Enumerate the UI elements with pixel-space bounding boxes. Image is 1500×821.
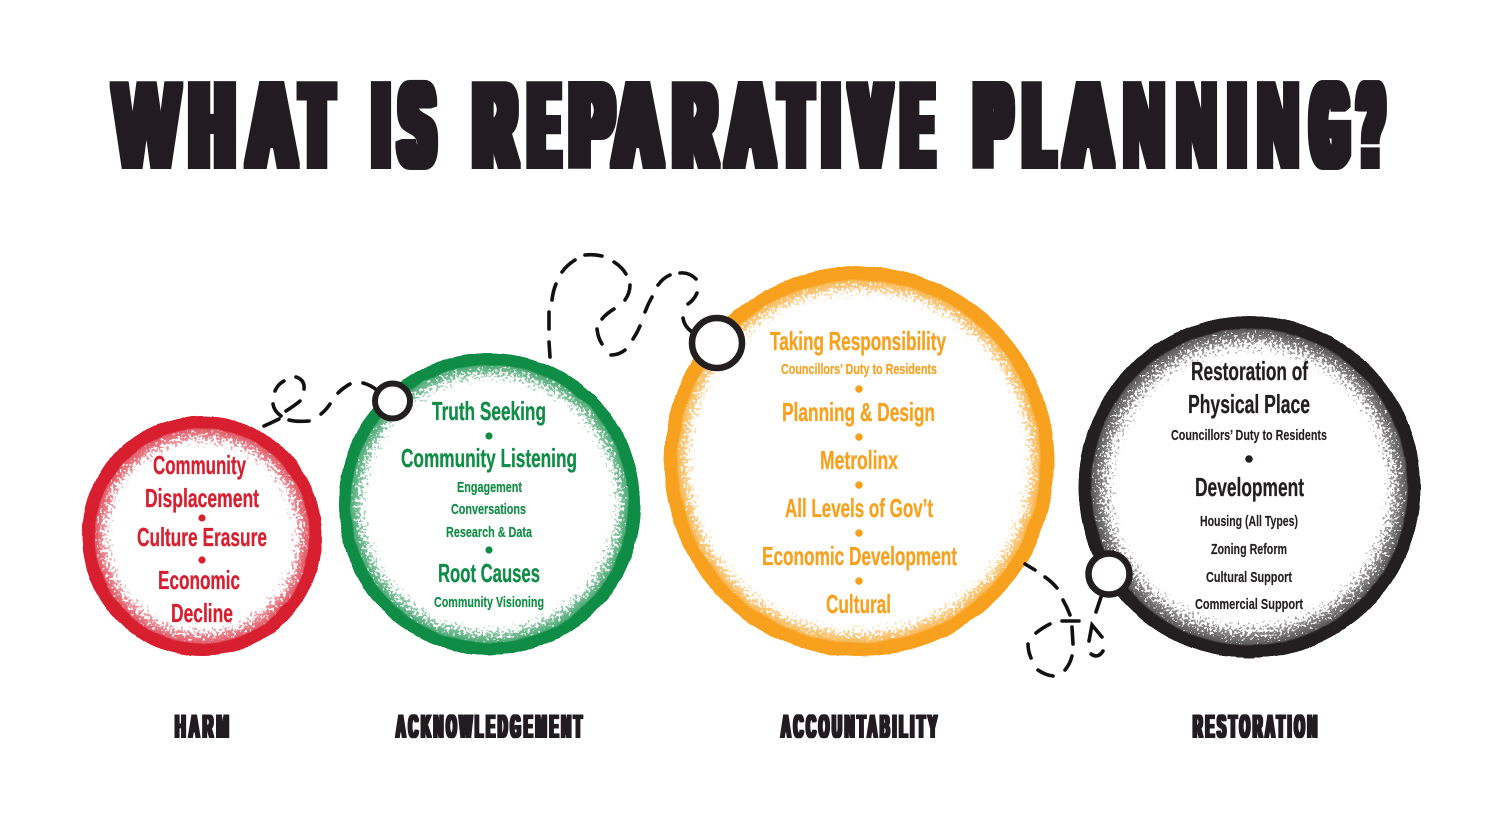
title [114,59,1382,192]
title: H [191,59,233,192]
title: P [976,59,1010,192]
title: N [1177,59,1216,192]
harm text: Community [153,450,246,480]
acknowledgement text: Conversations [451,501,526,518]
text: ? [1360,59,1382,192]
acknowledgement text: Root Causes [438,558,540,588]
panel: acknowledgement circle [338,353,640,655]
panel: restoration circle [1078,316,1420,658]
acknowledgement text: Research & Data [446,524,532,541]
node: restoration ring [1088,554,1130,594]
title: N [1258,59,1299,192]
title: A [615,59,660,192]
node: accountability ring [692,318,742,368]
title: V [852,59,888,192]
arrow: dashed path harm to acknowledgement [264,377,378,426]
harm text: Displacement [145,483,259,513]
stage labels: ACKNOWLEDGEMENT [396,708,585,744]
accountability text: Metrolinx [820,445,898,475]
accountability text: Planning & Design [782,397,935,427]
title: A [728,59,772,192]
accountability text: Taking Responsibility [770,326,946,356]
restoration text: Zoning Reform [1211,541,1287,558]
textured ring: restoration [1078,316,1420,658]
title: I [375,59,387,192]
accountability text: All Levels of Gov’t [785,493,933,523]
title: N [1124,59,1165,192]
acknowledgement text: Engagement [457,479,522,496]
acknowledgement text: Community Listening [401,443,577,473]
panel: harm circle [82,416,322,656]
acknowledgement text [401,396,577,611]
restoration text [1171,356,1327,613]
panel: accountability circle [664,266,1054,656]
restoration text: Restoration of [1191,356,1308,386]
title: R [675,59,715,192]
accountability text: Councillors’ Duty to Residents [781,361,937,378]
title: S [401,59,433,192]
title: I [825,59,837,192]
title: A [1066,59,1110,192]
restoration text: Development [1195,472,1304,502]
acknowledgement text: Community Visioning [434,594,544,611]
title: T [782,59,810,192]
harm text: Economic [158,565,240,595]
stage labels: HARM [175,708,232,744]
accountability text: Economic Development [762,541,957,571]
harm text: Decline [171,598,233,628]
restoration text: Physical Place [1188,389,1310,419]
title: P [571,59,612,192]
title: L [1026,59,1052,192]
arrow: dashed path acknowledgement to accountability [549,255,697,357]
title: T [303,59,331,192]
node: acknowledgement ring [375,384,410,418]
restoration text: Housing (All Types) [1200,513,1298,530]
title: E [904,59,932,192]
harm text: Culture Erasure [137,522,267,552]
title: A [249,59,294,192]
textured ring: acknowledgement [338,353,640,655]
title: G [1313,59,1347,192]
stage labels: ACCOUNTABILITY [781,708,940,744]
stage labels [175,708,1320,744]
textured ring: harm [82,416,322,656]
accountability text: Cultural [826,589,891,619]
harm text [137,450,267,628]
arrow: dashed path accountability to restoration [1025,564,1103,676]
text: RESTORATION [1193,708,1320,744]
title: E [531,59,558,192]
restoration text: Cultural Support [1206,569,1292,586]
accountability text [762,326,957,619]
title: R [475,59,515,192]
restoration text: Councillors’ Duty to Residents [1171,427,1327,444]
title: I [1231,59,1243,192]
acknowledgement text: Truth Seeking [432,396,546,426]
restoration text: Commercial Support [1195,596,1303,613]
textured ring: accountability [664,266,1054,656]
title: W [114,59,179,192]
